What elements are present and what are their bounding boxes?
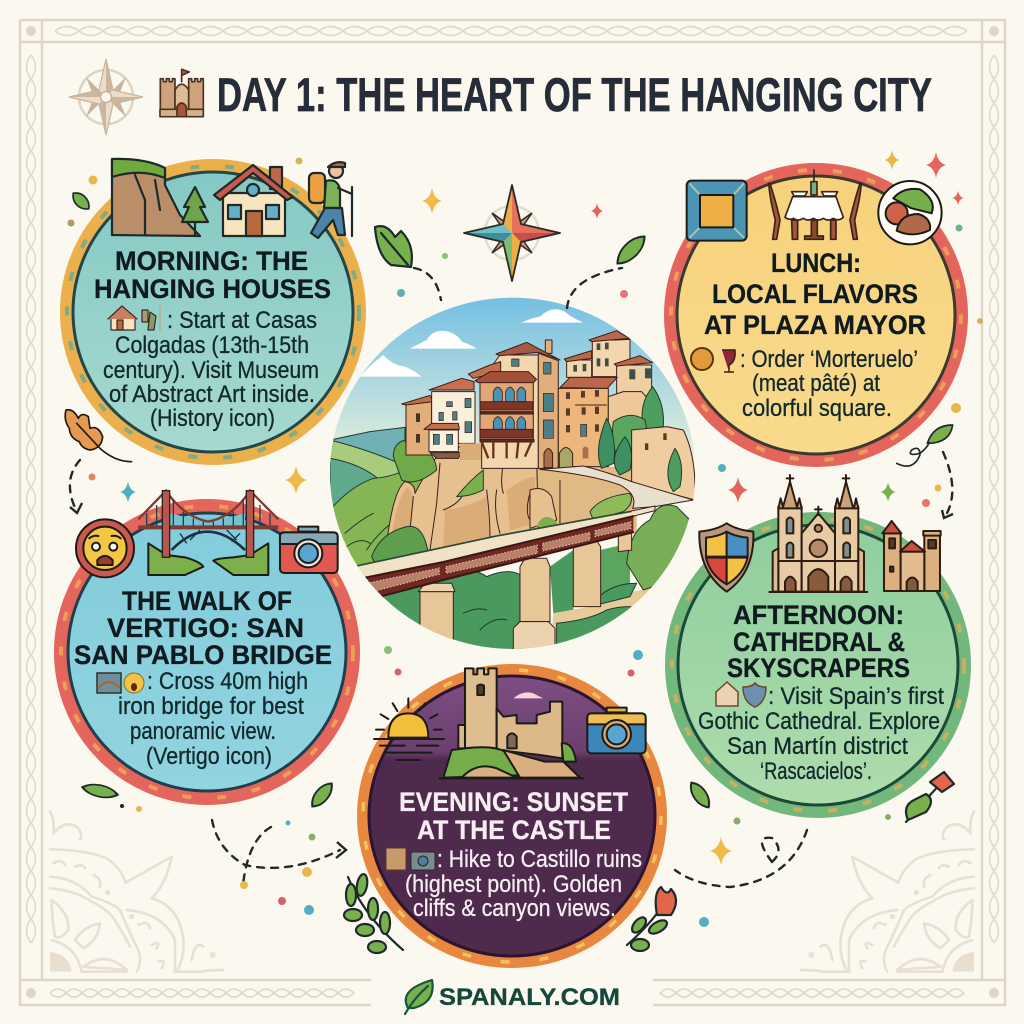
- leaf: orange oak: [65, 410, 132, 462]
- afternoon heading: [727, 600, 910, 683]
- mini icons: church and shield: [716, 682, 766, 707]
- lunch disc: [677, 176, 955, 454]
- icon: house: [214, 165, 293, 236]
- vertigo ring: [54, 499, 360, 805]
- dashed trail: center left: [414, 268, 441, 300]
- lunch heading: LOCAL FLAVORS: [712, 279, 918, 309]
- icon: cliff: [112, 159, 200, 236]
- icon: hiker: [309, 162, 352, 238]
- icons row: shield cathedral castle: [699, 475, 941, 592]
- vertigo heading: VERTIGO: SAN: [107, 613, 304, 643]
- lunch heading: AT PLAZA MAYOR: [704, 310, 926, 340]
- afternoon body text: [698, 683, 944, 785]
- icons row: face bridge camera: [76, 491, 338, 577]
- sky: [330, 290, 700, 463]
- lunch ring: [664, 163, 968, 467]
- morning body text: (History icon): [150, 405, 275, 432]
- dashed trail: right side arrow: [942, 452, 953, 518]
- afternoon body text: San Martín district: [727, 733, 908, 760]
- morning body text: century). Visit Museum: [103, 357, 319, 384]
- leaf: right small with curl: [897, 425, 953, 466]
- evening body text: [405, 846, 642, 922]
- icon: camera: [280, 527, 338, 573]
- left building: [406, 398, 432, 455]
- clouds: [360, 309, 583, 377]
- afternoon heading: AFTERNOON:: [733, 600, 904, 630]
- green on cliffs: [457, 470, 483, 497]
- icon: shocked face: [76, 519, 134, 577]
- leaf: top left of morning: [69, 189, 93, 213]
- mini icons: castle and camera: [386, 848, 435, 870]
- morning body text: [103, 307, 319, 432]
- confetti dots: [68, 158, 983, 927]
- vertigo body text: panoramic view.: [130, 718, 276, 745]
- afternoon disc: [678, 525, 958, 805]
- afternoon heading: CATHEDRAL &: [733, 627, 905, 657]
- panel: vertigo: [54, 491, 360, 805]
- evening heading: AT THE CASTLE: [417, 815, 611, 845]
- vertigo heading: [74, 586, 332, 670]
- vertigo heading: SAN PABLO BRIDGE: [74, 640, 332, 670]
- afternoon heading: SKYSCRAPERS: [727, 653, 910, 683]
- area under road: [537, 467, 637, 533]
- dashed trail: center right: [567, 268, 622, 308]
- header compass: [69, 59, 143, 135]
- icon: camera: [587, 708, 646, 753]
- header castle icon: [160, 69, 203, 117]
- left forest: [333, 472, 422, 575]
- corner ornament: bottom left mandala: [50, 812, 223, 972]
- evening body text: (highest point). Golden: [405, 871, 622, 898]
- lunch heading: [704, 248, 926, 340]
- panel: morning: [60, 159, 366, 465]
- mini icons: house and hiker: [108, 306, 160, 330]
- icon: leaf: [405, 980, 433, 1014]
- wooden balconies: [480, 382, 533, 440]
- morning disc: [73, 172, 353, 452]
- icon: food plate: [878, 181, 942, 244]
- brand name: SPANALY.COM: [439, 984, 620, 1011]
- leaf: bottom center left: [308, 779, 336, 811]
- icon: bridge: [138, 491, 278, 575]
- corner ornament: bottom right mandala: [801, 812, 974, 972]
- main tower: [482, 355, 538, 468]
- dashed trail: left side arrow: [70, 460, 82, 513]
- center compass star: [464, 185, 560, 281]
- icon: sunset: [374, 698, 444, 760]
- lunch body text: [740, 346, 918, 422]
- cliffs: [387, 447, 538, 553]
- icon: pine tree: [182, 187, 208, 236]
- afternoon body text: Gothic Cathedral. Explore: [698, 708, 940, 735]
- morning body text: Colgadas (13th-15th: [115, 332, 309, 359]
- morning heading: [94, 246, 331, 304]
- lower gorge forest: [378, 571, 524, 649]
- vertigo body text: iron bridge for best: [118, 693, 304, 720]
- morning body text: : Start at Casas: [167, 307, 317, 334]
- vertigo body text: (Vertigo icon): [146, 743, 272, 770]
- panel: evening: [357, 664, 667, 968]
- right buildings: [567, 360, 592, 377]
- icons row: sunset ruin camera: [374, 668, 646, 778]
- icon: shield: [699, 523, 753, 592]
- dashed trail: lower left arrow: [212, 820, 346, 885]
- morning heading: HANGING HOUSES: [94, 274, 331, 304]
- lunch heading: LUNCH:: [771, 248, 861, 278]
- vertigo heading: THE WALK OF: [122, 586, 292, 616]
- sprig: left of evening: [344, 873, 403, 953]
- mini icons: bridge and face: [97, 673, 144, 693]
- mini icons: paella and wine: [691, 348, 735, 372]
- lunch body text: colorful square.: [742, 395, 892, 422]
- evening heading: [399, 787, 628, 845]
- right bush: [627, 505, 693, 590]
- left lower bush: [372, 526, 428, 567]
- vertigo disc: [68, 513, 346, 791]
- leaf: center left: [375, 226, 412, 267]
- morning heading: MORNING: THE: [115, 246, 308, 276]
- icons row: tile table plate: [687, 170, 942, 244]
- bridge deck: [353, 506, 655, 579]
- sprig: flower right of evening: [627, 887, 676, 951]
- morning body text: of Abstract Art inside.: [109, 381, 315, 408]
- sprig: right of afternoon: [906, 772, 954, 822]
- afternoon body text: : Visit Spain’s first: [768, 683, 944, 710]
- panel: afternoon: [665, 475, 971, 818]
- lunch body text: : Order ‘Morteruelo’: [740, 346, 918, 373]
- vertigo body text: : Cross 40m high: [147, 668, 308, 695]
- bridge piers: [420, 592, 453, 643]
- castle wall: [632, 427, 695, 500]
- leaf: lower left: [81, 782, 119, 800]
- evening ring: [357, 664, 667, 968]
- icon: cathedral: [769, 475, 867, 592]
- leaf: center right: [612, 231, 650, 269]
- afternoon ring: [665, 512, 971, 818]
- white houses: [432, 392, 475, 443]
- lunch body text: (meat pâté) at: [752, 370, 880, 397]
- dashed trail: lower right: [675, 830, 807, 887]
- trees: [642, 387, 663, 430]
- sparkles: [120, 150, 964, 865]
- icon: tile: [687, 181, 747, 241]
- evening body text: : Hike to Castillo ruins: [437, 846, 642, 873]
- morning ring: [60, 159, 366, 465]
- afternoon body text: ‘Rascacielos’.: [760, 758, 872, 785]
- evening body text: cliffs & canyon views.: [413, 895, 616, 922]
- center scene: hanging houses and bridge: [330, 290, 700, 657]
- leaf: bottom center right: [686, 779, 714, 811]
- bushes by road: [590, 493, 631, 520]
- icon: castle ruin: [439, 668, 583, 778]
- evening disc: [369, 676, 655, 956]
- road: [540, 466, 693, 508]
- footer logo: [405, 980, 620, 1014]
- icon: dining table: [769, 170, 861, 239]
- evening heading: EVENING: SUNSET: [399, 787, 628, 817]
- panel: lunch: [664, 163, 968, 467]
- distant hills: [330, 427, 405, 463]
- vertigo body text: [118, 668, 308, 770]
- icon: town towers: [882, 521, 941, 591]
